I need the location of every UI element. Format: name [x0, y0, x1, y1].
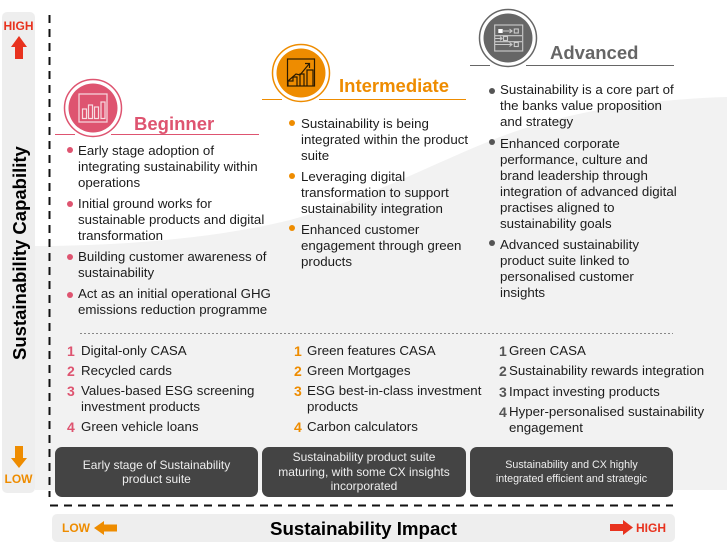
icon: beginner bar chart — [64, 78, 122, 138]
summary box: beginner: product suite — [122, 472, 191, 486]
list: advanced products: 2 — [499, 363, 507, 379]
bullets: performance, culture and — [500, 152, 648, 167]
axis title: Sustainability Impact — [270, 518, 457, 539]
heading: Intermediate — [339, 75, 449, 96]
bullets: insights — [500, 285, 545, 300]
summary box: intermediate: incorporated — [331, 479, 397, 493]
bullets: engagement through green — [301, 238, 461, 253]
list: intermediate products: 1 — [294, 343, 302, 359]
list: beginner products: Green vehicle loans — [81, 419, 199, 434]
heading rule — [262, 99, 466, 100]
icon: intermediate growth chart — [272, 44, 330, 102]
bullets: Initial ground works for — [78, 196, 212, 211]
list: beginner products: Recycled cards — [81, 363, 172, 378]
bullets: sustainability goals — [500, 216, 612, 231]
bullets: Early stage adoption of — [78, 143, 214, 158]
bullets: product suite linked to — [500, 253, 629, 268]
list: advanced products: 1 — [499, 343, 507, 359]
list: intermediate products — [294, 343, 482, 435]
list: advanced products: 4 — [499, 404, 507, 420]
list: intermediate products: Carbon calculators — [307, 419, 418, 434]
summary box: advanced: Sustainability and CX highly — [505, 458, 638, 470]
summary box: intermediate — [262, 447, 466, 497]
list: beginner products — [67, 343, 254, 435]
axis label high: HIGH — [4, 19, 34, 33]
summary box: intermediate: maturing, with some CX insights — [278, 465, 450, 479]
bullets: Enhanced corporate — [500, 136, 620, 151]
bullets: products — [301, 254, 352, 269]
list: beginner products: investment products — [81, 399, 200, 414]
list: advanced products: 3 — [499, 384, 507, 400]
bullets: suite — [301, 148, 329, 163]
list: intermediate products: Green features CASA — [307, 343, 436, 358]
bullets — [489, 82, 677, 300]
bullets: sustainability — [78, 265, 154, 280]
list: beginner products: 3 — [67, 383, 75, 399]
bullets: personalised customer — [500, 269, 634, 284]
bullets: emissions reduction programme — [78, 302, 267, 317]
list: intermediate products: 4 — [294, 419, 302, 435]
bullets: integration of advanced digital — [500, 184, 677, 199]
bullets: sustainability integration — [301, 201, 443, 216]
bullets: Advanced sustainability — [500, 237, 639, 252]
bullets: brand leadership through — [500, 168, 648, 183]
bullets: sustainable products and digital — [78, 212, 264, 227]
summary box: beginner — [55, 447, 258, 497]
icon: down arrow — [11, 446, 27, 468]
icon: right arrow — [610, 520, 633, 535]
bullets: Act as an initial operational GHG — [78, 286, 271, 301]
list: advanced products: Sustainability rewards integration — [509, 363, 704, 378]
bullets: integrated within the product — [301, 132, 468, 147]
bullets: Enhanced customer — [301, 222, 419, 237]
axis title: Sustainability Capability — [9, 146, 30, 360]
list: advanced products: Green CASA — [509, 343, 586, 358]
panel: beginner — [55, 78, 271, 317]
list: intermediate products: ESG best-in-class investment — [307, 383, 481, 398]
bullets: Building customer awareness of — [78, 249, 266, 264]
bullets: transformation to support — [301, 185, 449, 200]
list: advanced products: engagement — [509, 420, 583, 435]
list: intermediate products: 3 — [294, 383, 302, 399]
summary box: advanced — [470, 447, 673, 497]
bullets: transformation — [78, 228, 163, 243]
bullets: integrating sustainability within — [78, 159, 258, 174]
list: beginner products: 4 — [67, 419, 75, 435]
vertical axis band — [2, 12, 35, 493]
list: intermediate products: products — [307, 399, 358, 414]
heading rule — [470, 65, 674, 66]
axis label low: LOW — [62, 521, 90, 535]
bullets — [67, 143, 271, 317]
panel: advanced — [470, 8, 677, 300]
bullets: Leveraging digital — [301, 169, 405, 184]
list: intermediate products: 2 — [294, 363, 302, 379]
summary box: intermediate: Sustainability product suite — [293, 450, 435, 464]
icon: advanced process — [478, 8, 538, 68]
bullets: the banks value proposition — [500, 98, 662, 113]
list: advanced products — [499, 343, 704, 435]
heading rule — [55, 134, 259, 135]
icon: left arrow — [94, 521, 117, 535]
bullets: Sustainability is being — [301, 116, 429, 131]
panel: intermediate — [262, 44, 468, 269]
summary box: advanced: integrated efficient and strategic — [496, 473, 647, 485]
heading: Beginner — [134, 113, 214, 134]
bullets: and strategy — [500, 114, 573, 129]
list: beginner products: Digital-only CASA — [81, 343, 187, 358]
bullets: Sustainability is a core part of — [500, 82, 674, 97]
list: intermediate products: Green Mortgages — [307, 363, 410, 378]
bullets: practises aligned to — [500, 200, 615, 215]
list: advanced products: Hyper-personalised sustainability — [509, 404, 704, 419]
summary box: beginner: Early stage of Sustainability — [83, 458, 230, 472]
bullets — [289, 116, 468, 269]
axis label high: HIGH — [636, 521, 666, 535]
list: beginner products: 2 — [67, 363, 75, 379]
horizontal axis band — [52, 514, 675, 542]
list: beginner products: 1 — [67, 343, 75, 359]
list: advanced products: Impact investing products — [509, 384, 660, 399]
list: beginner products: Values-based ESG screening — [81, 383, 254, 398]
heading: Advanced — [550, 42, 638, 63]
bullets: operations — [78, 175, 140, 190]
axis label low: LOW — [4, 472, 32, 486]
icon: up arrow — [11, 36, 27, 59]
